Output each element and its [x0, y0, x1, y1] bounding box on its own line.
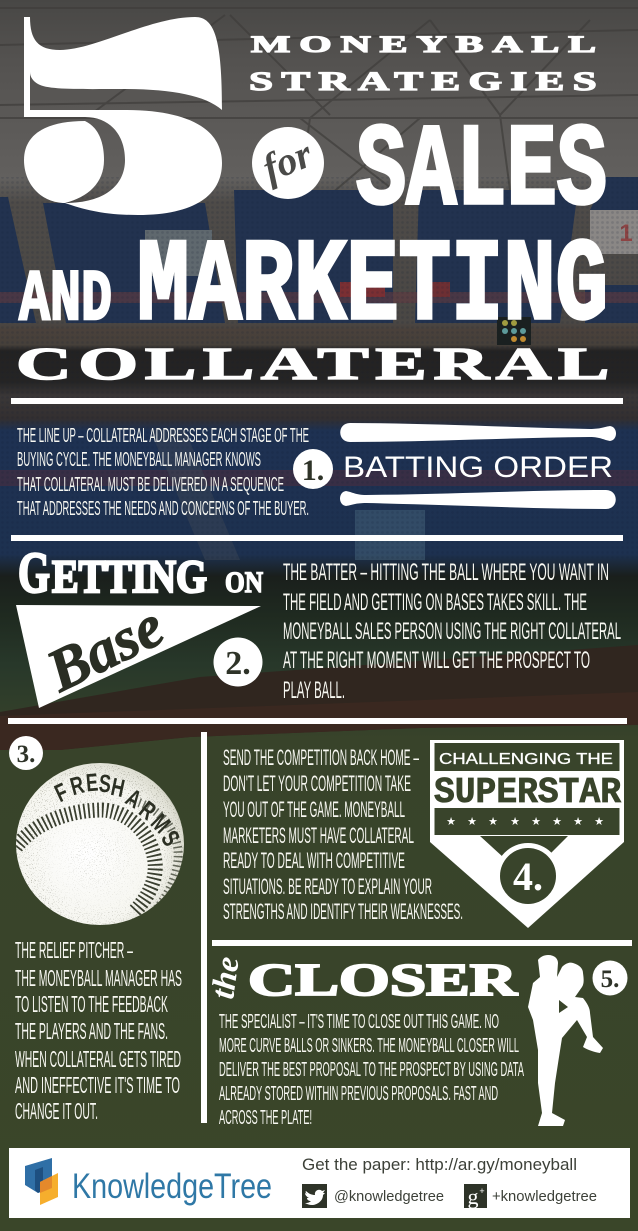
heading: getting on: ETTING: [52, 551, 207, 603]
text: THE PLAYERS AND THE FANS.: [15, 1018, 168, 1044]
red railings: [0, 282, 638, 303]
text: the batter: PLAY BALL.: [283, 677, 345, 704]
stars: ★: [594, 815, 604, 828]
text: send the competition: SEND THE COMPETITION BACK HOME –: [223, 745, 419, 770]
icon: pitcher silhouette: [528, 955, 603, 1126]
footer panel: [9, 1148, 630, 1218]
badge: for: for: [256, 131, 319, 191]
text: TO LISTEN TO THE FEEDBACK: [15, 991, 168, 1017]
number 2 badge: [214, 638, 262, 686]
twitter handle: @knowledgetree: [334, 1188, 444, 1205]
text: the line up: [17, 425, 309, 520]
heading: getting on: G: [18, 540, 50, 605]
get the paper link: Get the paper: http://ar.gy/moneyball: [302, 1156, 577, 1174]
home plate: challenging the superstar: CHALLENGING THE: [439, 751, 613, 768]
number 3 badge: [9, 736, 43, 770]
number 1 badge: 1.: [302, 454, 324, 487]
title: moneyball strategies: [249, 32, 605, 96]
google plus handle: +knowledgetree: [492, 1188, 597, 1205]
infield dirt: [0, 645, 638, 750]
stadium background photo: 1: [619, 220, 633, 247]
logo wordmark: KnowledgeTree: [72, 1167, 272, 1206]
ball lettering: S: [155, 825, 186, 851]
text: the specialist: ACROSS THE PLATE!: [219, 1107, 312, 1129]
ball lettering: R: [134, 795, 162, 826]
ball lettering: R: [67, 770, 87, 801]
icon: google plus: [464, 1184, 487, 1209]
text: the specialist: [219, 1011, 524, 1129]
ball lettering: [50, 768, 186, 851]
heading: batting order: BATTING ORDER: [343, 451, 613, 484]
number 3 badge: 3.: [17, 741, 35, 768]
ball lettering: F: [50, 777, 72, 808]
stars: ★: [467, 815, 477, 828]
vertical divider: [201, 732, 207, 1123]
heading: getting on: ON: [225, 566, 263, 599]
text: WHEN COLLATERAL GETS TIRED: [15, 1046, 181, 1072]
text: the line up: THAT COLLATERAL MUST BE DELIVERED IN A SEQUENCE: [17, 474, 284, 496]
stars: ★: [488, 815, 498, 828]
number 2 badge: 2.: [225, 645, 251, 682]
icon: bottom baseball bat: [340, 490, 616, 509]
divider 2: [11, 535, 623, 541]
divider 3: [8, 718, 627, 724]
number 1 badge: [293, 449, 333, 489]
number 5 badge: 5.: [601, 966, 619, 993]
seating blocks: [0, 177, 638, 323]
text: AND INEFFECTIVE IT'S TIME TO: [15, 1072, 180, 1098]
pennant: base: [16, 592, 261, 708]
logo: knowledgetree cube: [25, 1158, 58, 1205]
scoreboard lights: [497, 317, 531, 345]
icon: google plus: +: [479, 1186, 485, 1196]
icon: top baseball bat: [340, 423, 616, 442]
text: send the competition: READY TO DEAL WITH COMPETITIVE: [223, 848, 405, 873]
big numeral 5: [24, 17, 222, 215]
text: send the competition: DON'T LET YOUR COMPETITION TAKE: [223, 771, 411, 796]
title: and marketing: AND: [19, 259, 112, 341]
text: send the competition: MARKETERS MUST HAVE COLLATERAL: [223, 823, 414, 848]
ball lettering: A: [121, 783, 147, 814]
ball lettering: M: [145, 808, 176, 839]
stars: ★: [573, 815, 583, 828]
icon: google plus: g: [468, 1184, 478, 1209]
text: THAT ADDRESSES THE NEEDS AND CONCERNS OF THE BUYER.: [17, 498, 309, 520]
title: collateral: COLLATERAL: [16, 338, 616, 389]
home plate: challenging the superstar: 4.: [513, 854, 543, 899]
stars: ★: [552, 815, 562, 828]
stars: ★: [531, 815, 541, 828]
heading: getting on: [18, 540, 263, 605]
text: the relief pitcher: CHANGE IT OUT.: [15, 1098, 98, 1124]
text: send the competition: [223, 745, 463, 924]
text: the batter: [283, 559, 621, 704]
upper-level panels: [145, 230, 212, 276]
ball lettering: H: [109, 772, 127, 803]
ball lettering: E: [85, 768, 99, 797]
home plate: challenging the superstar: [430, 740, 624, 928]
pennant: base: Base: [36, 592, 174, 705]
baseball: fresh arms: [16, 763, 186, 927]
number 5 badge: [592, 960, 628, 996]
roof trusses: [0, 8, 638, 195]
text: THE MONEYBALL MANAGER HAS: [15, 965, 182, 991]
icon: twitter: [302, 1184, 327, 1208]
heading: closer: CLOSER: [248, 954, 518, 1005]
home plate: challenging the superstar: SUPERSTAR: [434, 772, 621, 813]
ball lettering: S: [98, 769, 112, 798]
divider 4: [212, 940, 632, 946]
title: moneyball strategies: MONEYBALL: [251, 32, 605, 57]
lower seating details: [0, 430, 638, 560]
text: the relief pitcher: THE RELIEF PITCHER –: [15, 937, 133, 963]
stars: ★: [510, 815, 520, 828]
divider 1: [11, 398, 623, 404]
text: the relief pitcher: [15, 937, 182, 1124]
stars: [446, 815, 604, 828]
text: the line up: BUYING CYCLE. THE MONEYBALL MANAGER KNOWS: [17, 449, 261, 471]
title: moneyball strategies: STRATEGIES: [249, 67, 605, 96]
text: THE LINE UP – COLLATERAL ADDRESSES EACH STAGE OF THE: [17, 425, 309, 447]
text: send the competition: YOU OUT OF THE GAME. MONEYBALL: [223, 797, 405, 822]
stars: ★: [446, 815, 456, 828]
script: the: the: [205, 954, 247, 1001]
